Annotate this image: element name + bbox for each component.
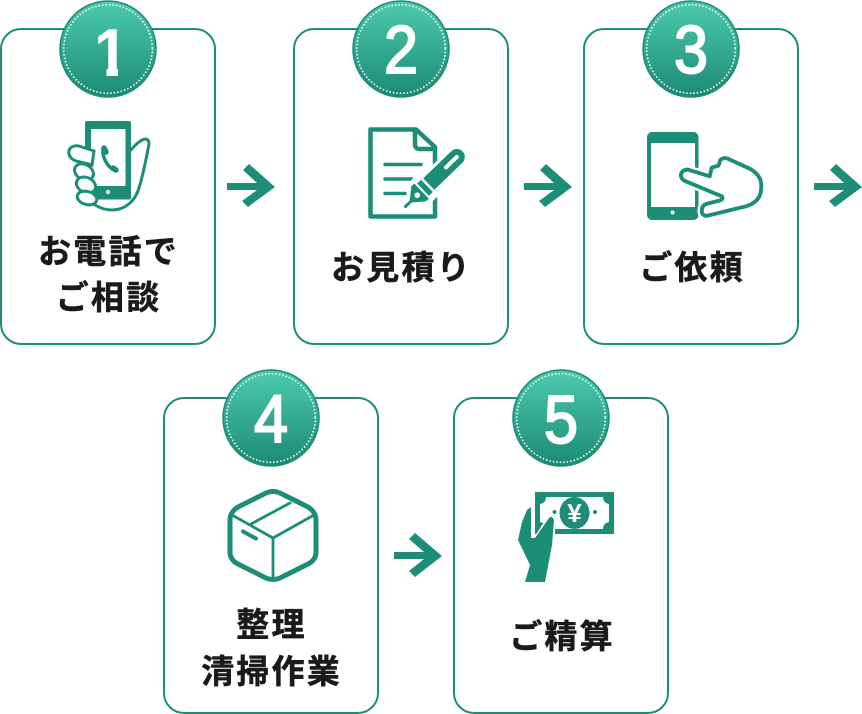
badge: step 3: 3 — [674, 11, 708, 88]
badge: step 2: 2 — [384, 11, 418, 88]
label: step 1: ご相談 — [56, 279, 161, 316]
panel: step 2 estimate — [294, 1, 508, 344]
badge: step 2 — [353, 1, 449, 97]
icon: hand holding yen banknote — [518, 492, 614, 582]
label: step 3: ご依頼 — [639, 249, 745, 286]
label: step 1: お電話で — [38, 233, 179, 270]
panel: step 3 request — [584, 1, 798, 344]
badge: step 1 — [60, 1, 156, 97]
badge: step 5 — [513, 370, 609, 466]
icon: hand holding smartphone — [69, 121, 149, 210]
label: step 5: ご精算 — [509, 618, 615, 655]
arrow: step 4 to 5 — [394, 533, 442, 577]
icon: finger tapping smartphone — [647, 132, 761, 220]
badge: step 5: 5 — [544, 381, 578, 458]
panel: step 1 phone consultation — [1, 1, 215, 344]
label: step 4: 清掃作業 — [201, 653, 342, 690]
panel: step 5 payment — [454, 370, 668, 713]
icon: hand holding yen banknote: ¥ — [567, 498, 582, 528]
panel: step 4 sorting and cleaning — [164, 370, 378, 713]
badge: step 3 — [643, 1, 739, 97]
icon: cardboard box — [230, 492, 316, 580]
label: step 4: 整理 — [236, 606, 307, 643]
label: step 2: お見積り — [331, 249, 472, 286]
arrow: step 1 to 2 — [227, 164, 275, 207]
arrow: step 2 to 3 — [524, 164, 572, 207]
badge: step 4: 4 — [254, 380, 288, 457]
arrow: step 3 to 4 — [814, 164, 862, 207]
badge: step 1: 1 — [94, 14, 128, 91]
badge: step 4 — [223, 370, 319, 466]
icon: document and fountain pen — [370, 130, 471, 217]
